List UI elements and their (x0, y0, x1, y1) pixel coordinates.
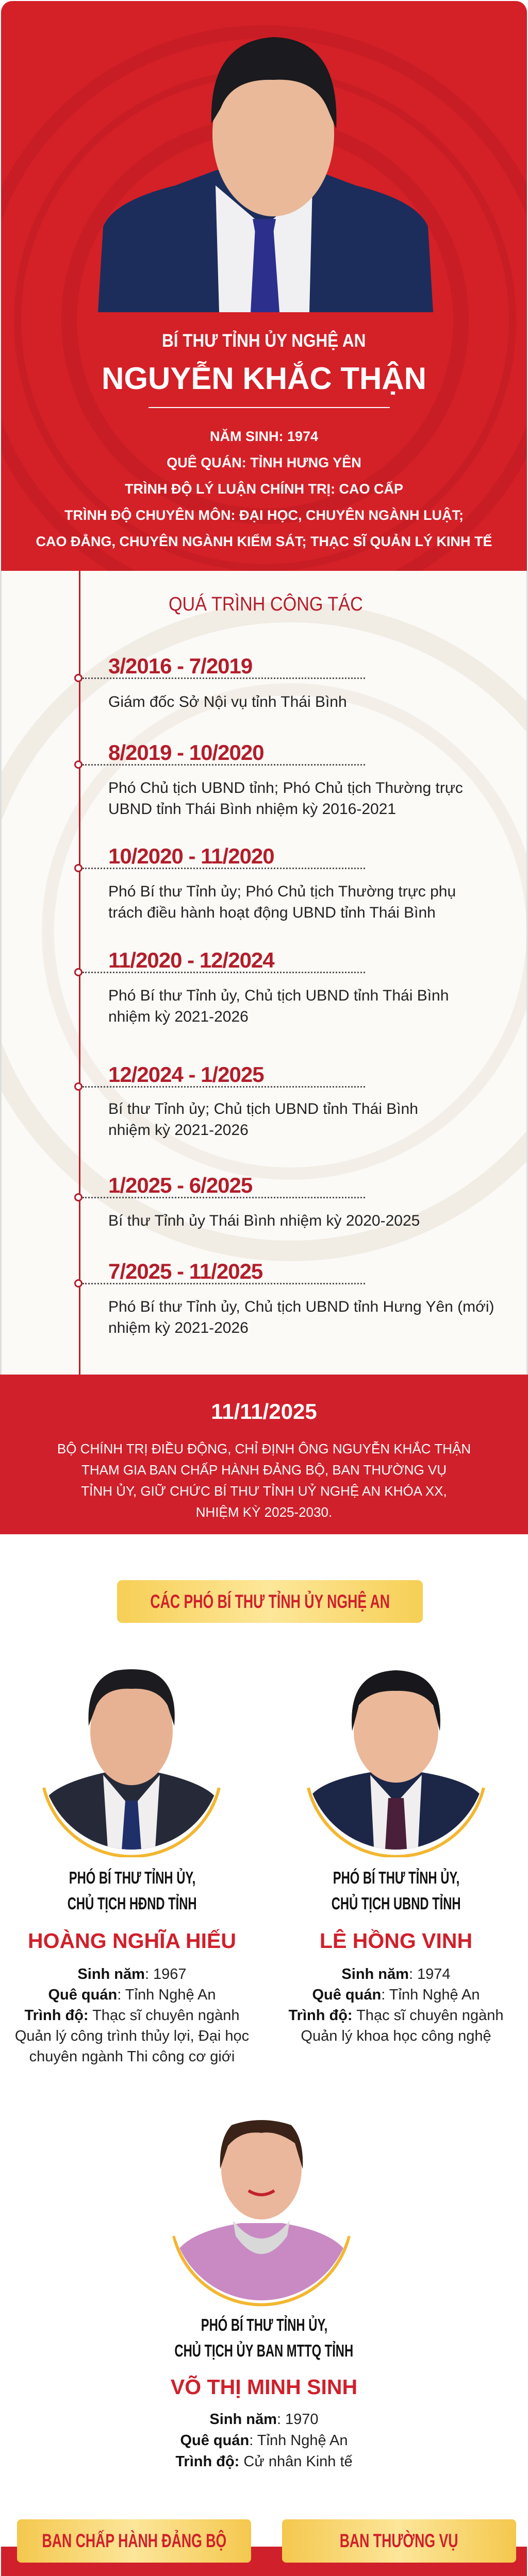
panel: appointment callout (0, 1375, 528, 1534)
entry 1: 3/2016 - 7/2019 (108, 654, 252, 678)
panel: committee stats (1, 2547, 527, 2576)
entry 7: nhiệm kỳ 2021-2026 (108, 1319, 249, 1336)
bio info (36, 429, 492, 549)
entry 5: Bí thư Tỉnh ủy; Chủ tịch UBND tỉnh Thái Bình (108, 1100, 418, 1117)
entry 4 (74, 948, 449, 1025)
profile: Võ Thị Minh Sinh: Trình độ: Cử nhân Kinh tế (175, 2453, 353, 2470)
profile: Lê Hồng Vinh: Sinh năm: 1974 (341, 1966, 451, 1982)
callout text: BỘ CHÍNH TRỊ ĐIỀU ĐỘNG, CHỈ ĐỊNH ÔNG NGUYỄN KHẮC THẬN (57, 1441, 471, 1456)
heading: deputy secretaries pill (117, 1580, 423, 1623)
entry 5: nhiệm kỳ 2021-2026 (108, 1122, 249, 1139)
portrait: Võ Thị Minh Sinh (172, 2120, 351, 2306)
entry 4: 11/2020 - 12/2024 (108, 948, 274, 972)
portrait: Lê Hồng Vinh (307, 1670, 485, 1857)
profile: Hoàng Nghĩa Hiếu: Quản lý công trình thủy lợi, Đại học (15, 2028, 249, 2044)
profile: Lê Hồng Vinh: CHỦ TỊCH UBND TỈNH (332, 1894, 460, 1913)
title: name: NGUYỄN KHẮC THẬN (102, 361, 426, 396)
portrait: main (98, 37, 433, 312)
profile: Hoàng Nghĩa Hiếu: HOÀNG NGHĨA HIẾU (28, 1929, 236, 1953)
entry 3: trách điều hành hoạt động UBND tỉnh Thái Bình (108, 904, 436, 921)
bio info: NĂM SINH: 1974 (210, 429, 318, 444)
entry 4: nhiệm kỳ 2021-2026 (108, 1008, 249, 1025)
stat: Ban chấp hành (17, 2519, 251, 2576)
title: position: BÍ THƯ TỈNH ỦY NGHỆ AN (162, 331, 366, 351)
entry 4: Phó Bí thư Tỉnh ủy, Chủ tịch UBND tỉnh Thái Bình (108, 987, 449, 1004)
profile: Lê Hồng Vinh (289, 1868, 503, 2044)
bio info: CAO ĐẲNG, CHUYÊN NGÀNH KIỂM SÁT; THẠC SĨ QUẢN LÝ KINH TẾ (36, 534, 492, 549)
profile: Hoàng Nghĩa Hiếu: Trình độ: Thạc sĩ chuyên ngành (25, 2007, 239, 2024)
profile: Võ Thị Minh Sinh (171, 2315, 357, 2470)
profile: Võ Thị Minh Sinh: VÕ THỊ MINH SINH (171, 2375, 357, 2399)
portrait: Hoàng Nghĩa Hiếu (42, 1669, 221, 1857)
profile: Hoàng Nghĩa Hiếu: CHỦ TỊCH HĐND TỈNH (68, 1894, 196, 1913)
entry 7: 7/2025 - 11/2025 (108, 1259, 262, 1283)
profile: Lê Hồng Vinh: Quê quán: Tỉnh Nghệ An (312, 1987, 480, 2003)
callout text (57, 1441, 471, 1520)
entry 2: UBND tỉnh Thái Bình nhiệm kỳ 2016-2021 (108, 801, 396, 818)
bio info: QUÊ QUÁN: TỈNH HƯNG YÊN (167, 455, 361, 470)
entry 5 (74, 1062, 418, 1139)
bio info: TRÌNH ĐỘ LÝ LUẬN CHÍNH TRỊ: CAO CẤP (125, 481, 403, 497)
profile: Võ Thị Minh Sinh: PHÓ BÍ THƯ TỈNH ỦY, (201, 2315, 327, 2334)
entry 5: 12/2024 - 1/2025 (108, 1062, 264, 1087)
profile: Lê Hồng Vinh: Trình độ: Thạc sĩ chuyên ngành (289, 2007, 503, 2024)
profile: Hoàng Nghĩa Hiếu: Quê quán: Tỉnh Nghệ An (48, 1987, 216, 2003)
stat: Ban thường vụ (282, 2519, 516, 2576)
callout text: THAM GIA BAN CHẤP HÀNH ĐẢNG BỘ, BAN THƯỜNG VỤ (81, 1462, 447, 1478)
entry 2: Phó Chủ tịch UBND tỉnh; Phó Chủ tịch Thường trực (108, 779, 463, 796)
profile: Hoàng Nghĩa Hiếu: PHÓ BÍ THƯ TỈNH ỦY, (69, 1868, 195, 1887)
profile: Lê Hồng Vinh: Quản lý khoa học công nghệ (301, 2028, 491, 2044)
callout text: NHIỆM KỲ 2025-2030. (196, 1504, 332, 1520)
heading: work history: QUÁ TRÌNH CÔNG TÁC (169, 594, 362, 615)
bio info: TRÌNH ĐỘ CHUYÊN MÔN: ĐẠI HỌC, CHUYÊN NGÀNH LUẬT; (64, 507, 464, 523)
profile: Võ Thị Minh Sinh: Sinh năm: 1970 (209, 2411, 319, 2428)
stat: Ban thường vụ: BAN THƯỜNG VỤ (340, 2530, 458, 2551)
callout date: 11/11/2025 (211, 1399, 317, 1423)
entry 2 (74, 740, 463, 818)
entry 1 (74, 654, 365, 710)
callout text: TỈNH ỦY, GIỮ CHỨC BÍ THƯ TỈNH UỶ NGHỆ AN KHÓA XX, (81, 1483, 447, 1499)
stat: Ban chấp hành: BAN CHẤP HÀNH ĐẢNG BỘ (42, 2530, 226, 2551)
profile: Lê Hồng Vinh: LÊ HỒNG VINH (320, 1929, 472, 1953)
entry 6 (74, 1173, 420, 1229)
profile: Võ Thị Minh Sinh: Quê quán: Tỉnh Nghệ An (180, 2432, 348, 2449)
entry 7: Phó Bí thư Tỉnh ủy, Chủ tịch UBND tỉnh Hưng Yên (mới) (108, 1298, 494, 1315)
heading: deputy secretaries pill: CÁC PHÓ BÍ THƯ TỈNH ỦY NGHỆ AN (150, 1591, 390, 1612)
entry 1: Giám đốc Sở Nội vụ tỉnh Thái Bình (108, 693, 347, 710)
entry 3: 10/2020 - 11/2020 (108, 844, 274, 868)
profile: Hoàng Nghĩa Hiếu (15, 1868, 249, 2065)
entry 6: Bí thư Tỉnh ủy Thái Bình nhiệm kỳ 2020-2025 (108, 1212, 420, 1229)
profile: Hoàng Nghĩa Hiếu: Sinh năm: 1967 (77, 1966, 187, 1982)
entry 7 (74, 1259, 494, 1336)
profile: Hoàng Nghĩa Hiếu: chuyên ngành Thi công cơ giới (29, 2048, 235, 2065)
entry 3 (74, 844, 456, 921)
entry 3: Phó Bí thư Tỉnh ủy; Phó Chủ tịch Thường trực phụ (108, 883, 456, 900)
panel: work history timeline (0, 571, 528, 1375)
profile: Võ Thị Minh Sinh: CHỦ TỊCH ỦY BAN MTTQ TỈNH (175, 2341, 353, 2360)
profile: Lê Hồng Vinh: PHÓ BÍ THƯ TỈNH ỦY, (333, 1868, 459, 1887)
entry 6: 1/2025 - 6/2025 (108, 1173, 252, 1197)
header red panel (1, 1, 527, 572)
entry 2: 8/2019 - 10/2020 (108, 740, 264, 765)
